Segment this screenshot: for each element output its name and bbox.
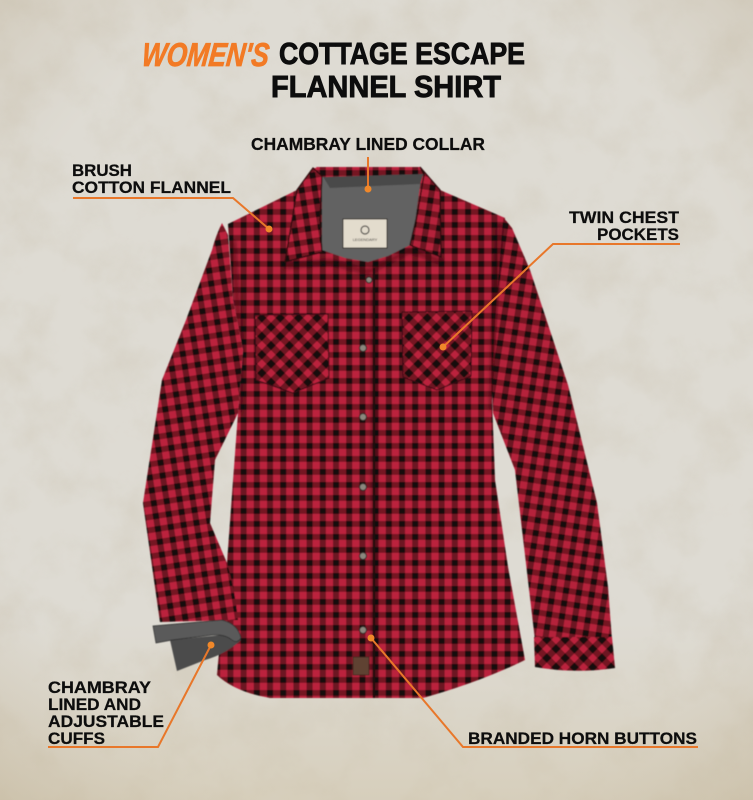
left rolled cuff — [153, 620, 241, 643]
callout: branded horn buttons — [368, 634, 698, 748]
callout: chambray lined and adjustable cuffs — [48, 642, 214, 748]
leather hem patch — [353, 657, 369, 675]
callout: brush cotton flannel — [72, 161, 272, 232]
callout: brush cotton flannel: COTTON FLANNEL — [72, 178, 231, 197]
shirt body — [217, 167, 525, 698]
lining shadow — [322, 172, 424, 188]
callout: branded horn buttons: BRANDED HORN BUTTONS — [468, 729, 697, 748]
left collar — [285, 168, 322, 262]
callout: chambray lined and adjustable cuffs: CUFFS — [48, 729, 105, 748]
callout: chambray lined collar — [251, 134, 485, 192]
right collar — [410, 167, 441, 257]
right chest pocket — [402, 311, 472, 390]
placket — [373, 268, 375, 698]
left sleeve — [143, 223, 243, 622]
callout: twin chest pockets — [440, 208, 680, 350]
flannel shirt illustration — [143, 167, 615, 698]
collar band — [316, 167, 424, 177]
callout: brush cotton flannel: BRUSH — [72, 161, 132, 180]
callout: twin chest pockets: POCKETS — [597, 225, 679, 244]
shirt buttons — [360, 277, 372, 634]
callout: twin chest pockets: TWIN CHEST — [569, 208, 680, 227]
right sleeve cuff — [534, 637, 615, 671]
title: FLANNEL SHIRT — [271, 69, 501, 104]
title: WOMEN'S — [140, 37, 271, 74]
callout: chambray lined and adjustable cuffs: ADJUSTABLE — [48, 712, 164, 731]
callout: chambray lined collar: CHAMBRAY LINED COLLAR — [251, 134, 485, 154]
title — [140, 36, 525, 104]
left chest pocket — [255, 314, 329, 393]
collar label: LEGENDARY — [353, 237, 378, 242]
seam fold shadows — [233, 225, 500, 690]
callout: chambray lined and adjustable cuffs: CHAMBRAY — [48, 678, 152, 697]
right sleeve — [492, 217, 612, 640]
left cuff lining flap — [170, 634, 241, 671]
title: COTTAGE ESCAPE — [279, 36, 525, 71]
collar label — [343, 219, 387, 248]
chambray collar lining — [322, 172, 422, 262]
callout: chambray lined and adjustable cuffs: LINED AND — [48, 695, 141, 714]
